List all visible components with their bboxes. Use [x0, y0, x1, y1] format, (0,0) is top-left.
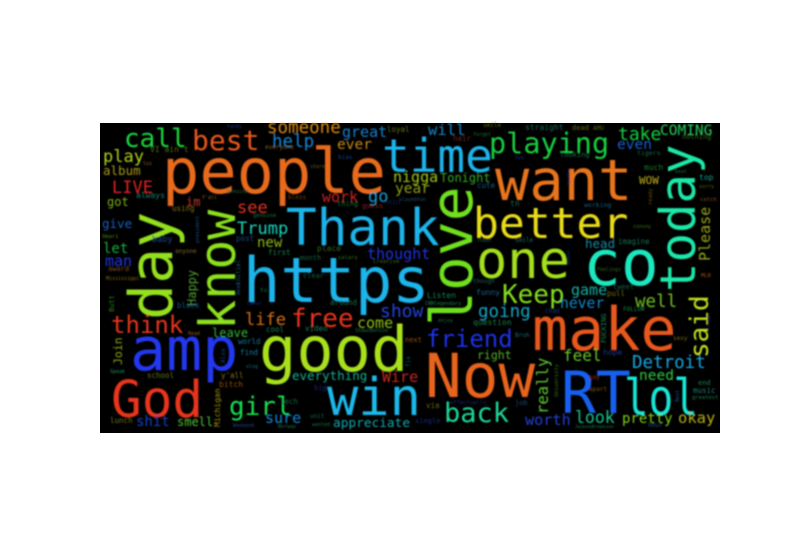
small filler words: Chad: [545, 308, 560, 315]
small filler words: sus: [515, 155, 524, 161]
word: day: day: [117, 212, 187, 320]
small filler words: bitch: [219, 380, 243, 389]
word: win: win: [327, 368, 421, 428]
small filler words: Best: [675, 390, 681, 402]
small filler words: Butt: [108, 295, 116, 312]
small filler words: Norway: [278, 424, 296, 430]
medium words: smell: [177, 415, 213, 429]
small filler words: school: [147, 371, 174, 380]
small filler words: imagine: [618, 237, 650, 246]
small filler words: trump: [706, 315, 712, 330]
medium words: will: [428, 121, 465, 139]
medium words: go: [368, 187, 388, 207]
small filler words: award: [108, 265, 129, 273]
small filler words: VI ain't: [150, 145, 189, 154]
small filler words: music: [693, 386, 716, 395]
medium words: need: [639, 368, 674, 384]
small filler words: vlog: [246, 364, 258, 370]
medium words: Tonight: [440, 171, 491, 185]
small filler words: hour: [648, 422, 663, 429]
word: said: said: [685, 295, 715, 358]
small filler words: catch: [700, 197, 717, 203]
medium words: okay: [678, 409, 715, 427]
word: friend: friend: [426, 325, 513, 353]
word: one: one: [476, 231, 570, 291]
medium words: Detroit: [632, 353, 706, 373]
medium words: never: [560, 295, 604, 312]
small filler words: AMU: [593, 125, 604, 132]
word: amp: amp: [130, 315, 238, 385]
medium words: see: [237, 198, 268, 218]
word: know: know: [189, 209, 247, 330]
small filler words: CNNlegendary: [425, 301, 461, 307]
small filler words: Mississippi: [106, 276, 139, 282]
small filler words: Weekend: [233, 423, 254, 429]
small filler words: hair: [453, 134, 472, 143]
small filler words: y'all: [221, 371, 244, 380]
small filler words: feelings: [597, 267, 621, 273]
medium words: nigga: [393, 168, 438, 186]
small filler words: salary: [338, 255, 359, 261]
small filler words: smile: [515, 237, 533, 244]
small filler words: tn: [510, 199, 520, 208]
small filler words: bias: [338, 154, 353, 161]
medium words: Wire: [382, 368, 418, 386]
medium words: got: [107, 195, 129, 209]
word: playing: playing: [489, 127, 609, 160]
small filler words: job: [515, 399, 528, 407]
medium words: shit: [136, 414, 170, 430]
small filler words: FOLLOW: [623, 306, 645, 313]
small filler words: video: [305, 324, 328, 333]
word: free: free: [291, 304, 354, 334]
small filler words: everyone: [265, 144, 294, 151]
small filler words: effactually: [450, 400, 487, 406]
small filler words: apart: [589, 386, 607, 393]
medium words: [102, 118, 715, 431]
small filler words: tweet: [613, 283, 634, 291]
small filler words: Creative: [373, 259, 400, 265]
small filler words: baby: [152, 235, 172, 245]
small filler words: find: [240, 348, 258, 357]
medium words: Join: [111, 337, 125, 365]
small filler words: clear: [303, 272, 324, 280]
small filler words: pull: [607, 289, 625, 298]
small filler words: working: [584, 201, 611, 209]
small filler words: Also: [220, 348, 227, 363]
medium words: work: [322, 188, 358, 206]
word: co: co: [583, 227, 659, 300]
medium words: appreciate: [333, 416, 410, 431]
medium words: WOW: [639, 174, 659, 187]
small filler words: Omari: [102, 234, 119, 240]
small filler words: straight: [525, 123, 564, 132]
small filler words: ready: [648, 188, 654, 205]
small filler words: wanted: [312, 422, 330, 428]
small filler words: cute: [477, 181, 496, 190]
medium words: COMING: [660, 123, 712, 139]
small filler words: [102, 122, 718, 430]
word: time: time: [382, 129, 493, 183]
medium words: worth: [525, 411, 571, 429]
medium words: sure: [265, 409, 301, 427]
medium words: album: [103, 163, 141, 178]
small filler words: first: [268, 248, 291, 257]
medium words: Trump: [237, 219, 288, 239]
small filler words: Dead: [236, 283, 242, 295]
small filler words: thing: [337, 200, 358, 208]
word: people: people: [162, 135, 386, 208]
small filler words: Listen: [427, 291, 456, 300]
small filler words: sexy: [673, 335, 688, 342]
medium words: LIVE: [112, 178, 153, 198]
small filler words: month: [300, 254, 321, 262]
small filler words: beat: [675, 169, 687, 175]
word: want: want: [495, 148, 632, 214]
word: call: call: [124, 124, 187, 154]
medium words: come: [357, 314, 393, 332]
small filler words: tech: [280, 397, 298, 406]
word: Keep: Keep: [502, 280, 565, 310]
small filler words: vlaymbhan: [399, 197, 426, 203]
medium words: year: [395, 181, 430, 197]
small filler words: anyone: [175, 248, 197, 255]
small filler words: tu: [260, 287, 268, 294]
medium words: give: [102, 216, 132, 231]
small filler words: forget: [473, 132, 491, 138]
small filler words: tus: [143, 161, 152, 167]
word: Now: Now: [425, 341, 535, 412]
medium words: man: [105, 252, 132, 270]
medium words: show: [380, 301, 424, 322]
small filler words: world: [238, 337, 261, 346]
small filler words: smile: [483, 122, 501, 129]
small filler words: guess: [362, 202, 383, 210]
small filler words: much: [644, 163, 663, 172]
small filler words: MLB: [701, 273, 712, 279]
small filler words: genuine: [227, 189, 248, 195]
small filler words: next: [405, 336, 422, 344]
small filler words: FUCKING: [600, 313, 608, 343]
word: God: God: [111, 371, 203, 430]
medium words: thought: [367, 245, 430, 263]
small filler words: dead: [572, 124, 589, 132]
medium words: even: [617, 137, 652, 153]
small filler words: unit: [310, 413, 325, 420]
medium words: really: [534, 358, 552, 414]
medium words: ever: [337, 137, 372, 153]
medium words: new: [257, 235, 283, 251]
medium words: well: [635, 292, 677, 312]
small filler words: question: [473, 318, 512, 327]
small filler words: though: [473, 278, 495, 285]
small filler words: Michigan: [213, 388, 222, 427]
small filler words: bless: [288, 194, 306, 201]
small filler words: fix: [405, 356, 412, 367]
small filler words: sorry: [699, 184, 714, 190]
word: better: better: [473, 199, 628, 249]
word: today: today: [650, 144, 707, 292]
small filler words: lunch: [110, 416, 133, 425]
small filler words: genuine: [253, 213, 276, 219]
small filler words: Speak: [110, 369, 125, 375]
small filler words: via: [426, 401, 440, 410]
word: lol: lol: [624, 369, 698, 427]
medium words: look: [575, 408, 615, 427]
small filler words: cool: [266, 325, 284, 334]
small filler words: post: [236, 234, 254, 243]
word: best: best: [192, 124, 259, 157]
small filler words: convoy: [633, 224, 651, 230]
medium words: play: [103, 147, 144, 167]
medium words: im: [186, 195, 200, 209]
small filler words: initial: [235, 259, 242, 285]
small filler words: twitter: [566, 168, 571, 185]
medium words: someone: [267, 118, 341, 138]
small filler words: Y'all: [202, 195, 217, 201]
small filler words: big: [314, 384, 327, 392]
medium words: everything: [292, 368, 367, 383]
small filler words: enjoy: [438, 318, 453, 324]
medium words: Please: [696, 207, 714, 261]
small filler words: around: [330, 298, 357, 307]
small filler words: looking: [560, 151, 590, 159]
medium words: take: [618, 124, 661, 145]
small filler words: Donald: [566, 250, 571, 265]
small filler words: always: [136, 191, 165, 200]
medium words: Happy: [185, 270, 199, 306]
medium words: let: [103, 241, 128, 257]
small filler words: hands: [227, 124, 242, 130]
small filler words: single: [415, 417, 440, 425]
medium words: head: [585, 236, 615, 251]
medium words: right: [477, 348, 512, 362]
small filler words: tigers: [637, 149, 661, 157]
medium words: feel: [563, 346, 602, 365]
small filler words: president: [195, 216, 201, 243]
small filler words: Read: [188, 331, 200, 337]
small filler words: still: [386, 200, 401, 206]
small filler words: gay: [589, 374, 600, 381]
medium words: leave: [212, 326, 248, 340]
small filler words: loyal: [387, 125, 410, 134]
small filler words: place: [317, 244, 341, 253]
word: love: love: [418, 186, 486, 326]
medium words: going: [478, 302, 531, 322]
medium words: great: [342, 123, 387, 141]
small filler words: black: [177, 301, 200, 310]
small filler words: hope: [603, 348, 622, 357]
medium words: game: [571, 281, 607, 299]
small filler words: using: [172, 204, 195, 213]
small filler words: Bruh: [515, 332, 530, 339]
medium words: help: [272, 132, 314, 152]
word: think: think: [111, 311, 184, 339]
small filler words: Lamar: [247, 301, 262, 307]
small filler words: end: [698, 379, 711, 387]
small filler words: JacksonBrownLove: [575, 424, 614, 429]
small filler words: University: [554, 363, 560, 397]
small filler words: greatest: [692, 395, 718, 401]
medium words: life: [245, 310, 286, 330]
word: back: back: [444, 398, 509, 429]
word: RT: RT: [561, 359, 631, 427]
small filler words: nothing: [682, 133, 712, 141]
medium words: pretty: [622, 411, 673, 427]
word: Thank: Thank: [286, 199, 440, 258]
word: girl: girl: [229, 392, 292, 422]
medium words: top: [699, 173, 714, 182]
small filler words: share: [310, 164, 325, 170]
word cloud text: [102, 118, 718, 431]
panel: black background: [100, 123, 720, 433]
small filler words: ShawnBenson: [355, 328, 388, 334]
small filler words: funny: [476, 288, 500, 297]
word: https: https: [243, 244, 430, 317]
small filler words: robot: [477, 238, 492, 244]
word: good: good: [259, 313, 408, 386]
word: make: make: [532, 295, 676, 365]
